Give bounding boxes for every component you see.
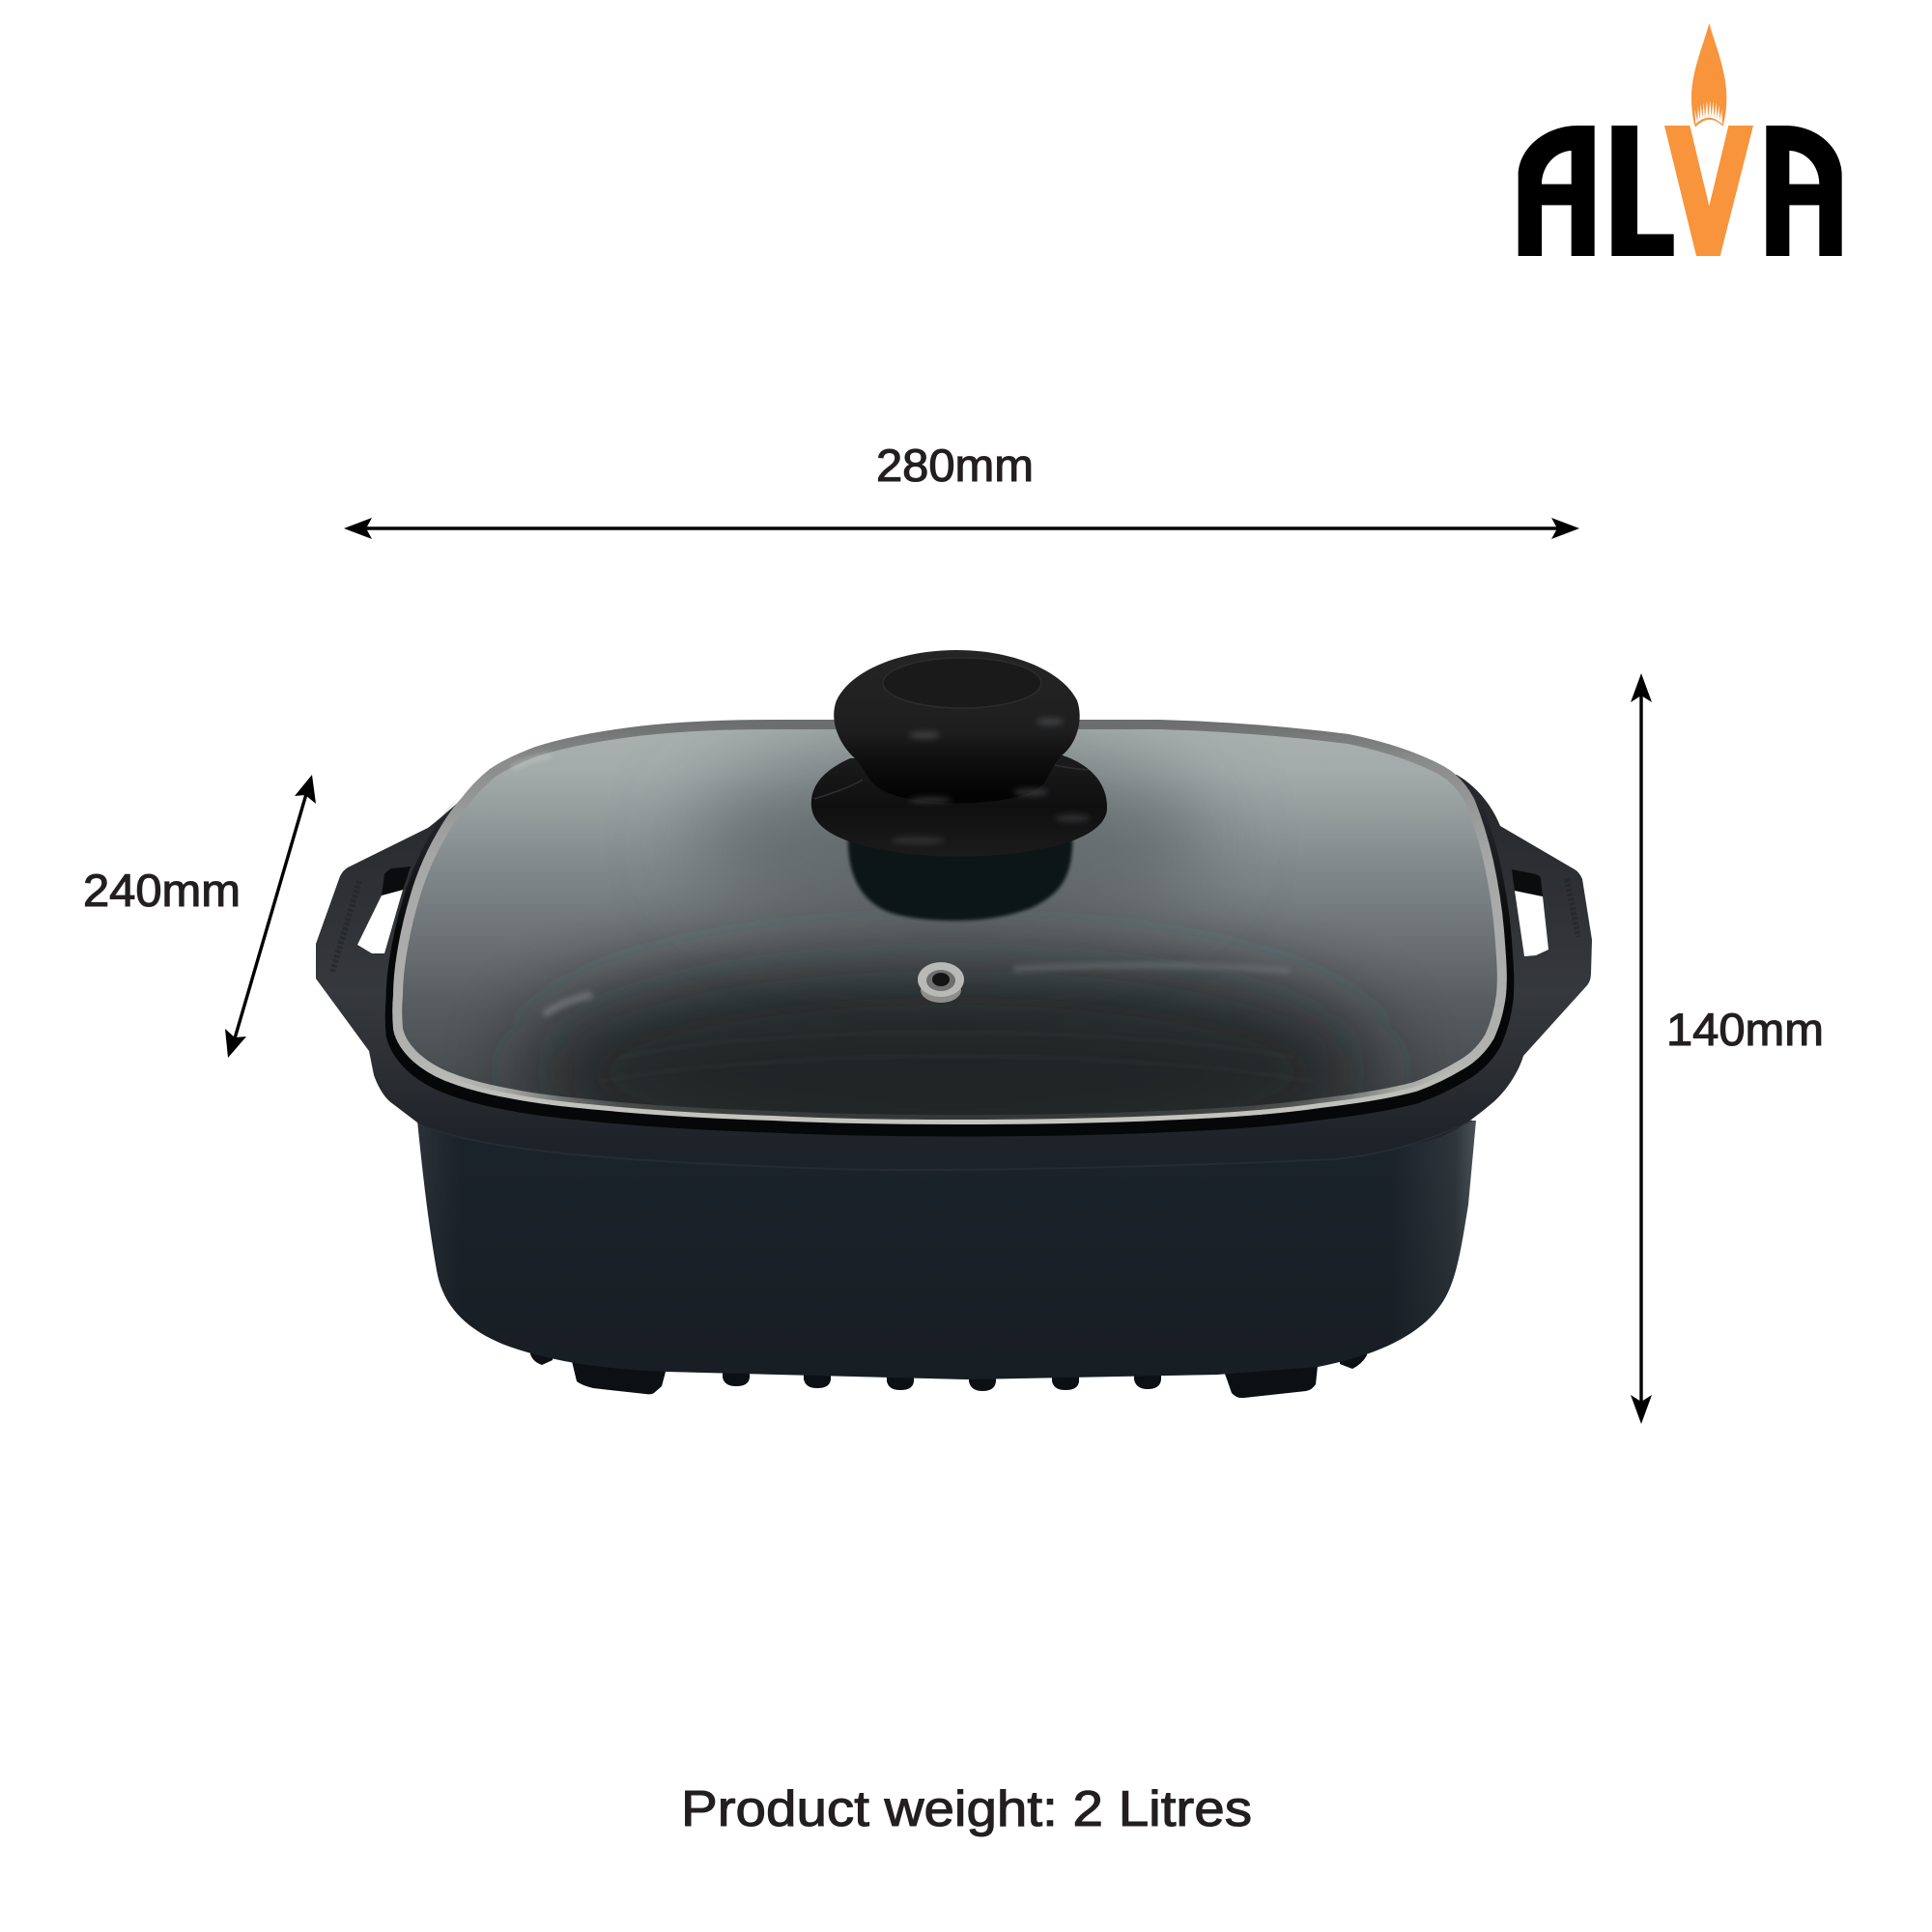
glass lid: [397, 724, 1502, 1120]
product weight caption: Product weight: 2 Litres: [681, 1781, 1252, 1837]
knob top: [834, 650, 1080, 804]
pot body: [417, 1121, 1476, 1379]
height arrow: [1631, 673, 1652, 1424]
steam vent: [918, 962, 964, 1003]
feet: [530, 1348, 1367, 1398]
width arrow: [344, 518, 1579, 539]
knob highlights: [891, 718, 1090, 844]
logo letter V: [1664, 126, 1753, 256]
dimension: height 140mm: [1631, 673, 1824, 1424]
logo letter A: [1766, 126, 1842, 256]
knob base: [811, 755, 1107, 857]
black gasket: [397, 778, 1502, 1124]
knob cap: [883, 658, 1041, 708]
knob seams: [814, 765, 1089, 799]
height label: 140mm: [1666, 1004, 1824, 1055]
depth label: 240mm: [83, 865, 241, 916]
logo: Alva: [1519, 23, 1842, 256]
lid knob: [811, 650, 1107, 857]
pot rim and handles: [316, 775, 1592, 1171]
logo flame: [1691, 23, 1726, 128]
handle engraving: [332, 879, 1578, 972]
knob reflection in glass: [848, 831, 1072, 921]
product photo: pot with glass lid: [316, 650, 1592, 1398]
glass reflections: [512, 744, 1377, 1188]
logo letter A: [1519, 126, 1595, 256]
depth arrow: [225, 775, 316, 1058]
dimension: width 280mm: [344, 440, 1579, 539]
width label: 280mm: [876, 440, 1034, 491]
handle slot shadows: [382, 867, 1543, 896]
rim shadow line: [421, 1121, 1472, 1170]
dimension: depth 240mm: [83, 775, 316, 1058]
logo letter L: [1611, 126, 1674, 256]
